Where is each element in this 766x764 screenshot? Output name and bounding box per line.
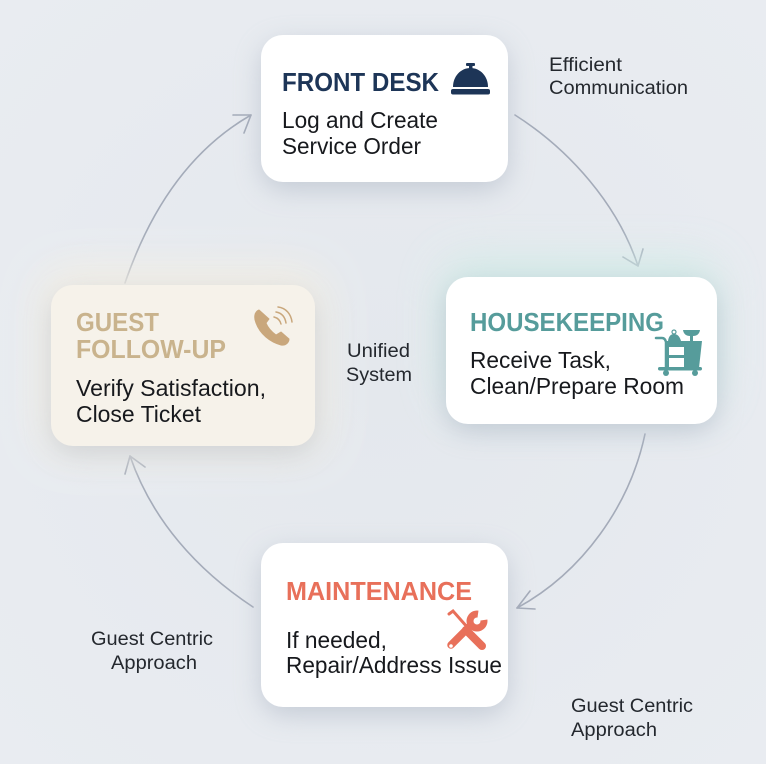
heading: guest follow-up: GUEST (76, 309, 159, 337)
label: guest centric approach, left: Guest Centric (91, 629, 213, 650)
panel: maintenance (261, 543, 508, 715)
text: maintenance description: Repair/Address Issue (286, 652, 502, 678)
label: guest centric approach, left: Approach (111, 653, 197, 674)
label: efficient communication: Communication (549, 78, 688, 99)
text: housekeeping description: Clean/Prepare Room (470, 373, 684, 399)
label: unified system: Unified (347, 341, 410, 362)
label: unified system: System (346, 365, 412, 386)
label: efficient communication: Efficient (549, 55, 623, 76)
heading: front desk: FRONT DESK (282, 69, 440, 97)
text: guest follow-up description: Verify Satisfaction, (76, 375, 266, 401)
arrow: housekeeping to maintenance (517, 434, 645, 609)
label: guest centric approach, right: Approach (571, 720, 657, 741)
arrow: front desk to housekeeping (515, 115, 643, 266)
arrow: maintenance to guest follow-up (125, 456, 253, 607)
heading: maintenance: MAINTENANCE (286, 578, 472, 606)
text: guest follow-up description: Close Ticket (76, 401, 201, 427)
icon: housekeeping cart (656, 330, 702, 376)
icon: wrench and screwdriver (449, 607, 492, 648)
text: housekeeping description: Receive Task, (470, 347, 611, 373)
heading: housekeeping: HOUSEKEEPING (470, 309, 664, 337)
icon: service bell (451, 63, 490, 94)
text: front desk description: Service Order (282, 133, 421, 159)
icon: phone with signal (255, 307, 292, 345)
heading: guest follow-up: FOLLOW-UP (76, 336, 226, 364)
panel: guest follow-up (40, 270, 325, 454)
label: guest centric approach, right: Guest Centric (571, 696, 693, 717)
arrow: guest follow-up to front desk (125, 115, 251, 283)
text: front desk description: Log and Create (282, 107, 438, 133)
panel: front desk (261, 35, 508, 190)
text: maintenance description: If needed, (286, 627, 387, 653)
panel: housekeeping (440, 258, 720, 432)
